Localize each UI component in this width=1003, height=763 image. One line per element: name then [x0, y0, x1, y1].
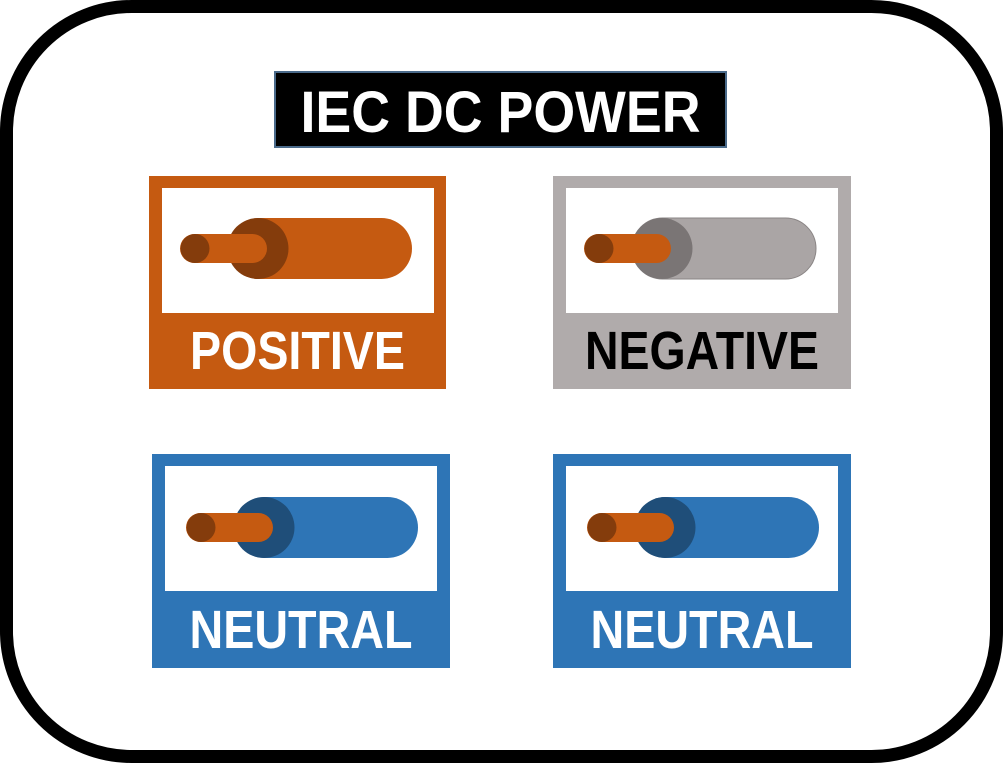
panel: neutral right: NEUTRAL: [590, 600, 814, 660]
panel: neutral right: [553, 454, 851, 668]
panel: positive: POSITIVE: [190, 321, 405, 381]
icon: neutral wire left: [186, 497, 418, 558]
panel: negative: [553, 176, 851, 389]
icon: neutral wire right: [587, 497, 819, 558]
panel: neutral left: [152, 454, 450, 668]
panel: neutral left: NEUTRAL: [190, 600, 412, 660]
panel: negative: NEGATIVE: [585, 321, 819, 381]
icon: positive wire: [180, 218, 412, 279]
title: IEC DC POWER: [300, 80, 700, 145]
icon: negative wire: [584, 218, 816, 279]
panel: positive: [149, 176, 446, 389]
